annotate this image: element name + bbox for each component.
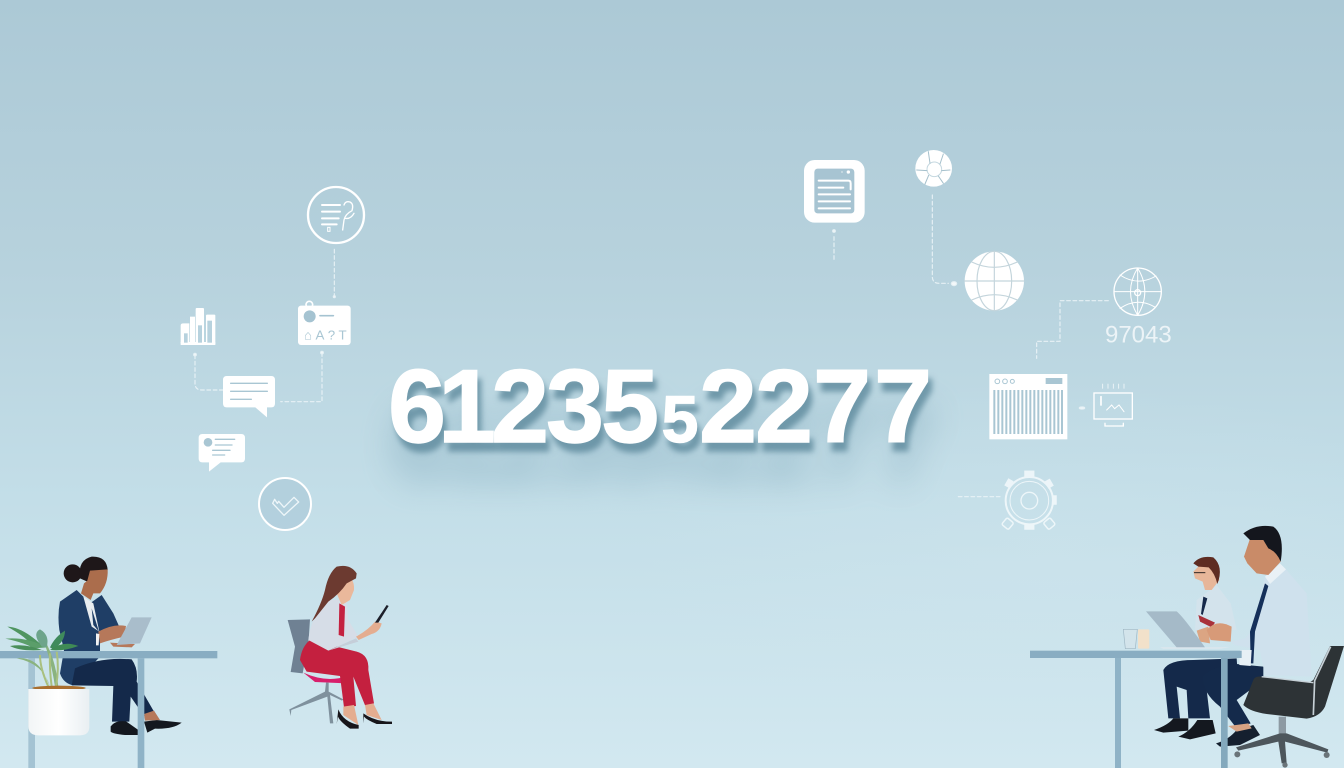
headline number: 5 [662, 382, 698, 456]
headline number: 5 [601, 349, 659, 465]
desk back leg [28, 658, 35, 768]
icon: large globe [965, 251, 1024, 311]
glass and cup [1123, 629, 1149, 649]
headline number: 2 [491, 349, 549, 465]
label: 97043: 97043 [1105, 322, 1172, 349]
icon: speech bubble small [199, 434, 245, 472]
desk [1030, 651, 1242, 768]
icon: ID card: ⌂A?T [304, 327, 347, 342]
seated woman with tablet [58, 557, 182, 735]
headline number: 2 [755, 349, 813, 465]
headline number: 1 [438, 349, 496, 465]
laptop [1146, 611, 1230, 649]
headline number: 3 [546, 349, 604, 465]
left desk scene [0, 557, 392, 768]
icon: gear [1002, 471, 1056, 530]
icon: wireframe globe [1114, 268, 1161, 315]
right desk scene [1030, 526, 1344, 768]
tall man with tie and chair [1178, 526, 1312, 747]
woman with phone on chair [288, 566, 392, 729]
desk [0, 651, 217, 768]
icon: small globe [915, 150, 952, 187]
icon: bar chart [181, 308, 215, 345]
icon: check circle [259, 478, 311, 530]
potted plant [5, 627, 89, 735]
headline number: 7 [813, 349, 871, 465]
right icon network [804, 150, 1172, 530]
headline number: 6 [388, 349, 446, 465]
left icon network [181, 187, 364, 530]
headline number: 2 [699, 349, 757, 465]
headline number [388, 349, 932, 465]
dashed connectors [194, 249, 335, 402]
headline number: 7 [874, 349, 932, 465]
office chair [1234, 646, 1344, 768]
dashed connectors [833, 195, 1108, 497]
icon: document and profile circle [308, 187, 364, 243]
icon: monitor [1094, 384, 1132, 426]
icon: browser window [989, 374, 1067, 439]
icon: ID card [298, 301, 351, 345]
young man with glasses [1154, 557, 1238, 733]
icon: speech bubble large [223, 376, 275, 417]
icon: document tile [804, 160, 865, 223]
